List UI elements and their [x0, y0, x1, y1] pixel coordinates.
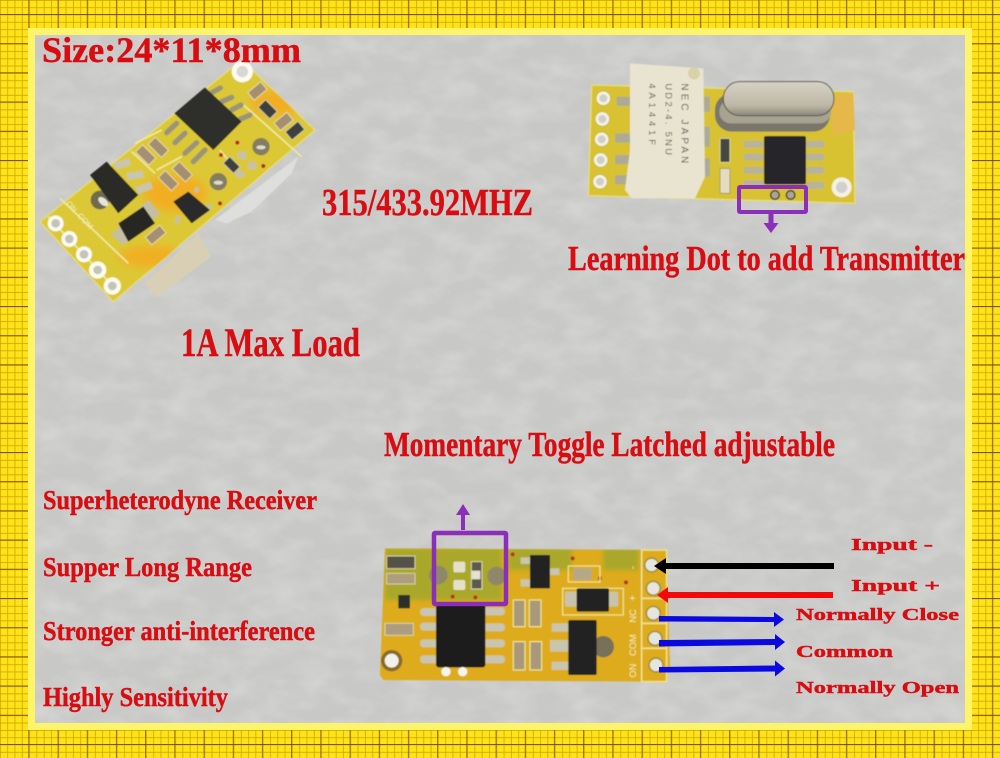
- relay print: NEC JAPAN: [679, 83, 690, 163]
- silkscreen labels: +: [628, 595, 639, 601]
- red via dots: [218, 141, 265, 205]
- arrow: normally close blue: [659, 612, 784, 627]
- pale pads: [236, 152, 256, 177]
- label: input minus: Input -: [851, 535, 934, 554]
- small resistor: [720, 138, 730, 162]
- capacitor body: [573, 568, 592, 580]
- chip pins: [743, 141, 824, 189]
- silkscreen labels: ON: [64, 199, 79, 214]
- white relay: [625, 63, 705, 198]
- SOT223 regulator: [90, 162, 152, 213]
- olive board areas: [385, 548, 638, 600]
- learning dots: [771, 191, 795, 199]
- terminal labels: [796, 535, 960, 697]
- relay print: 4A1441F: [647, 83, 657, 145]
- orange copper area: [830, 93, 855, 137]
- pale silkscreen lines: [48, 103, 302, 287]
- circuit board: [588, 85, 855, 203]
- SOT transistor top: [521, 555, 559, 588]
- left passive components: [385, 556, 415, 635]
- circuit board: [380, 548, 670, 682]
- pin holes: [48, 215, 121, 295]
- label: normally close: Normally Close: [796, 605, 960, 624]
- silkscreen labels: ON: [628, 664, 638, 678]
- relay body under board: [145, 233, 211, 297]
- mounting hole: [381, 650, 402, 671]
- learning area highlight box: [434, 533, 506, 604]
- small transistor package: [111, 200, 160, 245]
- purple arrow up: [456, 504, 470, 530]
- learning dot highlight box: [739, 187, 806, 212]
- heading: size: Size:24*11*8mm: [42, 30, 301, 70]
- panel: angled receiver board photo: [40, 60, 315, 302]
- SOIC chip: [174, 87, 242, 150]
- feature: long range: Supper Long Range: [43, 552, 252, 582]
- feature: sensitivity: Highly Sensitivity: [43, 682, 228, 712]
- pin hole centres: [51, 219, 117, 290]
- heading: momentary toggle latched: Momentary Toggle Latched adjustable: [384, 425, 835, 464]
- circuit board: [40, 60, 315, 302]
- crystal top: [723, 82, 834, 116]
- SOIC chip pins: [167, 88, 250, 162]
- arrow: common blue: [659, 634, 785, 650]
- small capacitor: [720, 168, 730, 193]
- label: input plus: Input +: [851, 576, 940, 595]
- label: common: Common: [796, 642, 894, 661]
- dark components right: [223, 100, 305, 173]
- outlined terminal strip: [642, 550, 667, 682]
- passive components centre: [513, 600, 542, 670]
- black chip: [436, 604, 485, 667]
- tan capacitors: [136, 82, 293, 245]
- feature: anti-interference: Stronger anti-interference: [43, 616, 315, 646]
- feature: superheterodyne receiver: Superheterodyne Receiver: [43, 485, 317, 515]
- pin holes: [593, 91, 611, 189]
- relay dot mark: [688, 67, 700, 79]
- silkscreen labels: -: [628, 566, 639, 569]
- arrow: input plus red: [657, 587, 833, 603]
- feature list: [43, 485, 317, 712]
- relay print: UD2-4. 5NU: [664, 83, 674, 155]
- panel: top view board with relay and crystal: [588, 63, 855, 203]
- pin hole centres: [596, 94, 607, 186]
- relay control components: [429, 562, 506, 590]
- heading: frequency: 315/433.92MHZ: [322, 182, 533, 224]
- black chip: [764, 136, 806, 184]
- red via dots: [451, 552, 628, 599]
- mounting hole: [232, 61, 253, 82]
- relay pins: [615, 97, 710, 184]
- power regulator: [550, 620, 614, 675]
- diode package: [563, 588, 623, 615]
- orange copper areas: [118, 90, 300, 267]
- silkscreen labels: [64, 199, 95, 231]
- chip pins: [420, 607, 505, 663]
- silkscreen labels: COM: [76, 211, 95, 231]
- crystal lower rim: [719, 100, 831, 123]
- relay print: [647, 83, 690, 163]
- label: normally open: Normally Open: [796, 678, 960, 697]
- purple arrow down: [764, 213, 778, 233]
- arrow: input minus black: [654, 558, 834, 574]
- silkscreen labels: COM: [628, 634, 638, 656]
- terminal holes: [645, 558, 663, 672]
- silkscreen labels: NC: [628, 609, 638, 623]
- crystal base: [715, 93, 830, 132]
- panel: bottom view board with chip and terminals: [380, 548, 670, 682]
- arrow: normally open blue: [659, 660, 785, 676]
- capacitor top right: [568, 566, 600, 582]
- learning dots on chip: [441, 667, 467, 676]
- round solder pads: [210, 138, 270, 190]
- silkscreen labels: [628, 566, 639, 678]
- white relay side under board: [215, 157, 298, 223]
- label: max load: 1A Max Load: [181, 320, 360, 365]
- SOT23 transistor: [173, 188, 212, 223]
- mounting hole: [832, 177, 852, 197]
